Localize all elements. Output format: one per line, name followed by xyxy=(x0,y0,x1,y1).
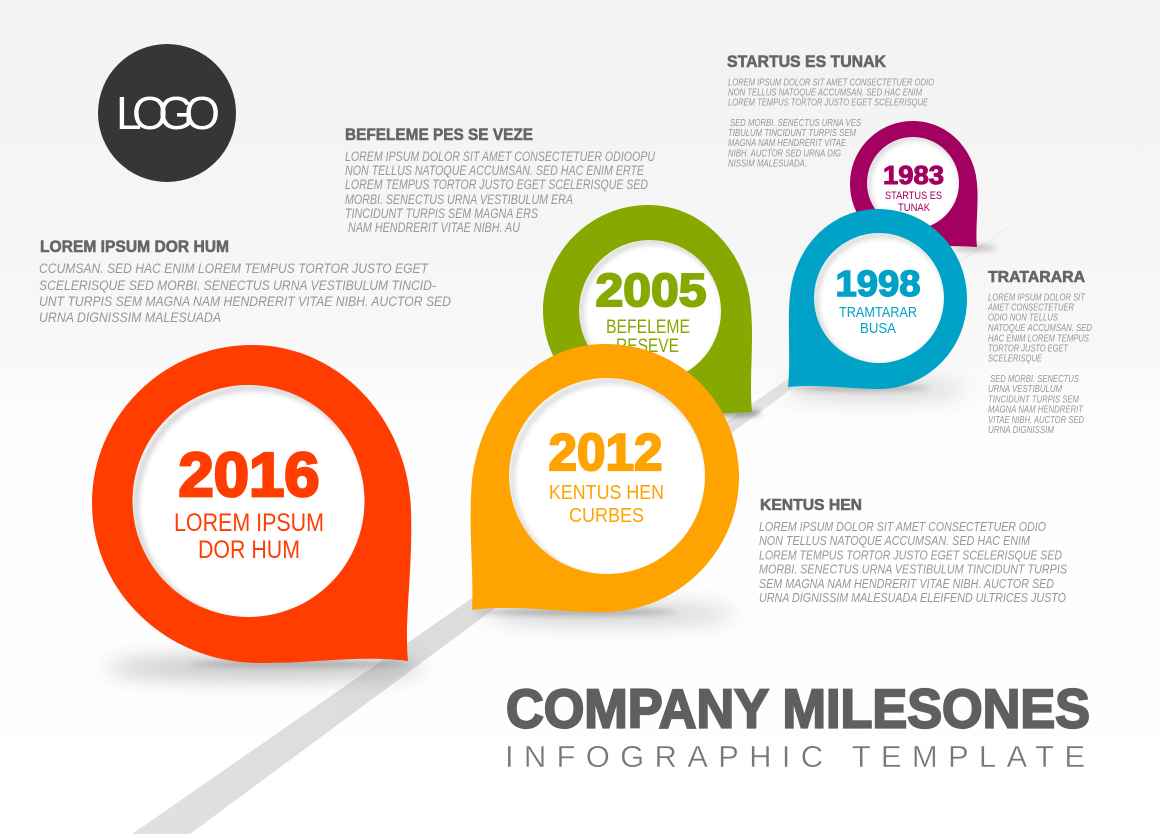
pin: 2016 xyxy=(92,345,425,678)
text block: lorem ipsum dor hum xyxy=(39,237,451,325)
label: kentus hen curbes: KENTUS HEN xyxy=(549,482,664,504)
text block: befeleme pes se veze: LOREM IPSUM DOLOR SIT AMET CONSECTETUER ODIOOPU xyxy=(345,149,655,164)
text block: startus es tunak: NON TELLUS NATOQUE ACCUMSAN. SED HAC ENIM xyxy=(728,88,923,98)
text block: startus es tunak: NISSIM MALESUADA. xyxy=(728,158,807,170)
label: befeleme reseve: BEFELEME xyxy=(606,317,690,338)
year 1998: 1998 xyxy=(836,263,920,304)
year 2012: 2012 xyxy=(548,424,662,482)
text block: startus es tunak: LOREM IPSUM DOLOR SIT AMET CONSECTETUER ODIO xyxy=(728,78,934,88)
text block: befeleme pes se veze: NON TELLUS NATOQUE ACCUMSAN. SED HAC ENIM ERTE xyxy=(345,163,645,178)
text block: befeleme pes se veze: NAM HENDRERIT VITAE NIBH. AU xyxy=(348,220,520,235)
text block: befeleme pes se veze: TINCIDUNT TURPIS SEM MAGNA ERS xyxy=(345,206,538,221)
text block: lorem ipsum dor hum: CCUMSAN. SED HAC ENIM LOREM TEMPUS TORTOR JUSTO EGET xyxy=(39,261,430,276)
text block: startus es tunak: NIBH. AUCTOR SED URNA DIG xyxy=(728,148,841,160)
text block: tratarara: SCELERISQUE xyxy=(988,354,1042,364)
text block: tratarara: URNA VESTIBULUM xyxy=(988,384,1063,395)
text block: kentus hen xyxy=(759,497,1067,605)
text block: tratarara: SED MORBI. SENECTUS xyxy=(990,374,1079,385)
text block: befeleme pes se veze xyxy=(345,125,655,235)
text block: kentus hen: URNA DIGNISSIM MALESUADA ELEIFEND ULTRICES JUSTO xyxy=(759,590,1066,605)
label: lorem ipsum dor hum: DOR HUM xyxy=(198,536,300,564)
logo xyxy=(98,44,236,182)
label: startus es tunak xyxy=(885,190,942,214)
title: COMPANY MILESONES xyxy=(506,678,1090,740)
subtitle: INFOGRAPHIC TEMPLATE xyxy=(505,739,1085,774)
label: lorem ipsum dor hum xyxy=(174,509,324,564)
text block: befeleme pes se veze: MORBI. SENECTUS URNA VESTIBULUM ERA xyxy=(345,192,573,207)
label: tramtarar busa xyxy=(839,305,917,337)
text block: tratarara: AMET CONSECTETUER xyxy=(987,302,1074,314)
text block: startus es tunak: TIBULUM TINCIDUNT TURPIS SEM xyxy=(728,128,857,139)
label: befeleme reseve: RESEVE xyxy=(616,336,679,357)
text block: befeleme pes se veze: LOREM TEMPUS TORTOR JUSTO EGET SCELERISQUE SED xyxy=(345,177,648,192)
text block: tratarara: HAC ENIM LOREM TEMPUS xyxy=(988,334,1089,344)
text block: kentus hen: LOREM TEMPUS TORTOR JUSTO EGET SCELERISQUE SED xyxy=(759,548,1062,562)
text block: kentus hen: MORBI. SENECTUS URNA VESTIBULUM TINCIDUNT TURPIS xyxy=(759,562,1067,576)
text block: startus es tunak: MAGNA NAM HENDRERIT VITAE xyxy=(728,138,846,149)
label: tramtarar busa: TRAMTARAR xyxy=(839,305,917,321)
text block: tratarara xyxy=(987,269,1092,436)
year 2005: 2005 xyxy=(596,264,706,316)
text block: lorem ipsum dor hum: URNA DIGNISSIM MALESUADA xyxy=(39,310,221,325)
label: startus es tunak: STARTUS ES xyxy=(885,190,942,202)
timeline road xyxy=(132,190,1060,834)
logo: LOGO xyxy=(116,87,220,139)
label: lorem ipsum dor hum: LOREM IPSUM xyxy=(174,509,324,537)
text block: tratarara: TINCIDUNT TURPIS SEM xyxy=(988,394,1080,406)
text block: tratarara: LOREM IPSUM DOLOR SIT xyxy=(988,292,1086,304)
label: tramtarar busa: BUSA xyxy=(860,321,896,337)
text block: startus es tunak: SED MORBI. SENECTUS URNA VES xyxy=(730,118,861,129)
label: kentus hen curbes: CURBES xyxy=(569,505,644,527)
text block: lorem ipsum dor hum: SCELERISQUE SED MORBI. SENECTUS URNA VESTIBULUM TINCID- xyxy=(39,278,436,293)
text block: kentus hen: KENTUS HEN xyxy=(760,497,862,514)
year 1983: 1983 xyxy=(883,160,944,190)
text block: kentus hen: NON TELLUS NATOQUE ACCUMSAN. SED HAC ENIM xyxy=(759,533,1031,548)
pin: 1998 xyxy=(785,209,967,396)
text block: tratarara: TRATARARA xyxy=(988,269,1085,286)
text block: startus es tunak: STARTUS ES TUNAK xyxy=(727,52,887,71)
text block: tratarara: MAGNA NAM HENDRERIT xyxy=(988,404,1084,416)
label: kentus hen curbes xyxy=(549,482,664,527)
year 2016: 2016 xyxy=(178,441,320,510)
text block: tratarara: NATOQUE ACCUMSAN. SED xyxy=(988,323,1092,334)
label: startus es tunak: TUNAK xyxy=(898,202,931,214)
text block: startus es tunak: LOREM TEMPUS TORTOR JUSTO EGET SCELERISQUE xyxy=(728,98,928,108)
pin: 1983 xyxy=(850,121,997,251)
text block: befeleme pes se veze: BEFELEME PES SE VEZE xyxy=(345,125,533,144)
text block: lorem ipsum dor hum: UNT TURPIS SEM MAGNA NAM HENDRERIT VITAE NIBH. AUCTOR SED xyxy=(39,294,451,309)
pin: 2012 xyxy=(471,344,739,622)
text block: tratarara: ODIO NON TELLUS xyxy=(988,312,1058,324)
text block: tratarara: VITAE NIBH. AUCTOR SED xyxy=(988,415,1084,426)
pin: 2005 xyxy=(543,205,761,416)
text block: tratarara: URNA DIGNISSIM xyxy=(988,425,1055,436)
text block: kentus hen: SEM MAGNA NAM HENDRERIT VITAE NIBH. AUCTOR SED xyxy=(759,576,1054,591)
text block: tratarara: TORTOR JUSTO EGET xyxy=(988,344,1069,354)
text block: startus es tunak xyxy=(727,52,934,170)
label: befeleme reseve xyxy=(606,317,690,357)
text block: kentus hen: LOREM IPSUM DOLOR SIT AMET CONSECTETUER ODIO xyxy=(759,519,1046,534)
text block: lorem ipsum dor hum: LOREM IPSUM DOR HUM xyxy=(40,237,229,256)
